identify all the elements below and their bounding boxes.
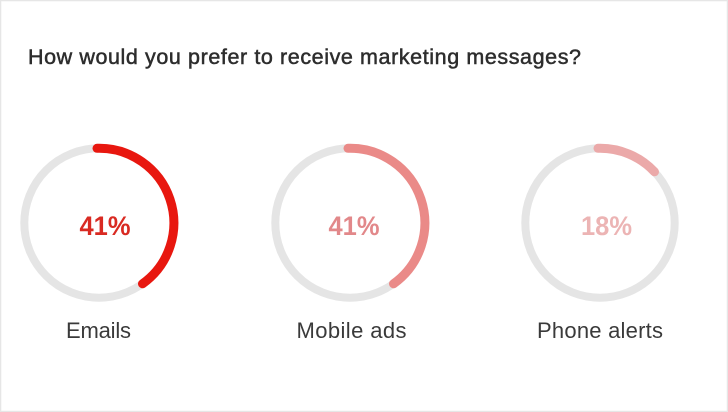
donut: Emails: Emails [66, 318, 131, 343]
donut: Emails [24, 148, 174, 343]
donut: Phone alerts: Phone alerts [537, 318, 663, 343]
donut: Mobile ads: 41% [328, 211, 380, 241]
donut: Mobile ads: Mobile ads [296, 318, 406, 343]
donut: Phone alerts: 18% [581, 211, 632, 241]
donut: Mobile ads [275, 148, 425, 343]
title: How would you prefer to receive marketing messages? [28, 45, 581, 69]
donut: Phone alerts [525, 148, 675, 343]
donut: Emails: 41% [80, 211, 130, 241]
